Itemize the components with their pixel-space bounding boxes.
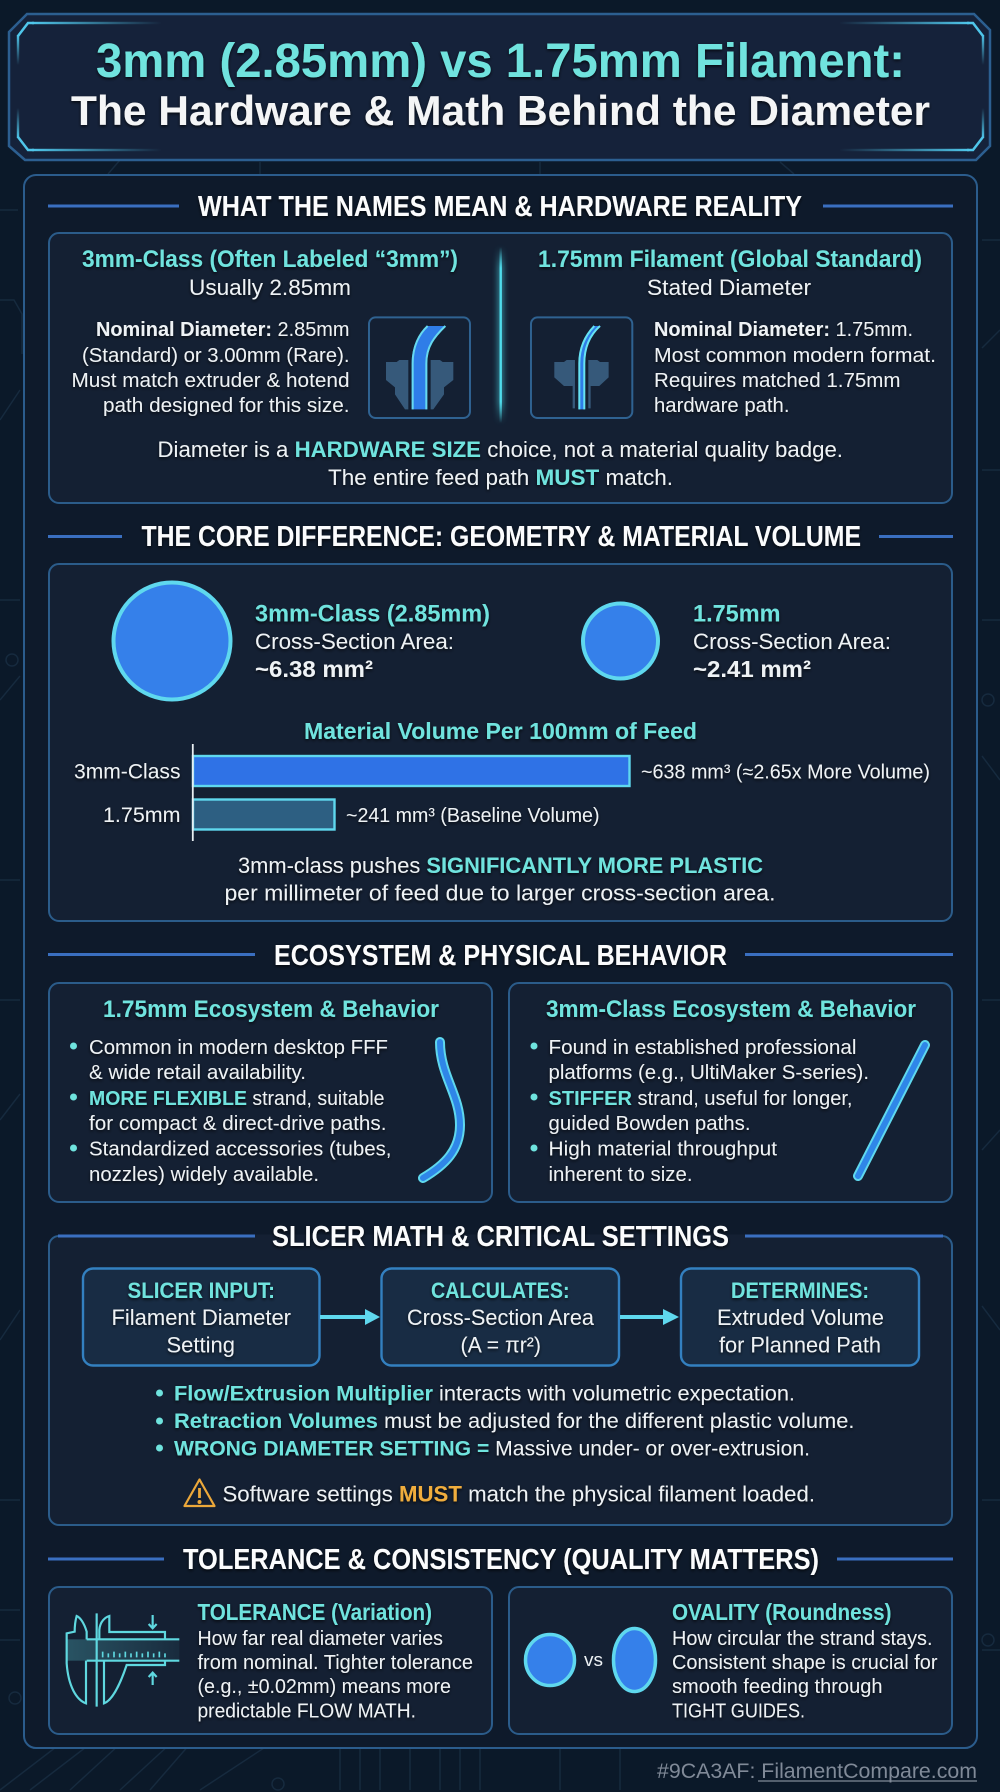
panel: 3mm ecosystem: guided Bowden paths. xyxy=(548,1113,750,1135)
bullet list: slicer notes: WRONG DIAMETER SETTING = Massive under- or over-extrusion. xyxy=(174,1436,810,1460)
icon: large cross-section circle xyxy=(114,582,230,700)
panel: 3mm ecosystem: STIFFER strand, useful for longer, xyxy=(548,1088,852,1110)
arrow: calculates to determines xyxy=(620,1309,679,1325)
text block: 3mm-class: (Standard) or 3.00mm (Rare). xyxy=(82,345,350,367)
icon: flexible strand xyxy=(423,1042,460,1178)
text block: 3mm-class xyxy=(72,246,458,417)
bar chart: material volume: ~241 mm³ (Baseline Volume) xyxy=(346,805,600,827)
panel: 1.75mm ecosystem: MORE FLEXIBLE strand, suitable xyxy=(89,1088,384,1110)
flow box: slicer input: SLICER INPUT: xyxy=(128,1278,275,1303)
text block: 3mm area xyxy=(255,600,490,682)
heading: ecosystem: ECOSYSTEM & PHYSICAL BEHAVIOR xyxy=(274,940,727,972)
callout: hardware size: Diameter is a HARDWARE SIZE choice, not a material quality badge. xyxy=(158,437,843,462)
text block: 1.75mm area xyxy=(693,600,891,682)
flow box: determines: DETERMINES: xyxy=(731,1278,869,1303)
chart title: Material Volume Per 100mm of Feed xyxy=(304,718,697,744)
panel: 1.75mm ecosystem: Standardized accessories (tubes, xyxy=(89,1138,392,1160)
text block: 3mm area: 3mm-Class (2.85mm) xyxy=(255,600,490,628)
panel: 3mm ecosystem: inherent to size. xyxy=(548,1164,692,1186)
flow box: calculates: (A = πr²) xyxy=(460,1332,541,1358)
bullet list: slicer notes: Flow/Extrusion Multiplier interacts with volumetric expectation. xyxy=(174,1382,795,1406)
icon: 1.75mm nozzle xyxy=(531,317,632,418)
bar: 3mm-class xyxy=(193,756,630,786)
panel: 1.75mm ecosystem: for compact & direct-drive paths. xyxy=(89,1113,386,1135)
footer credit: #9CA3AF: FilamentCompare.com xyxy=(657,1760,977,1783)
text block: 3mm area: Cross-Section Area: xyxy=(255,629,454,654)
heading: what the names mean: WHAT THE NAMES MEAN & HARDWARE REALITY xyxy=(198,191,802,223)
panel: ovality: smooth feeding through xyxy=(672,1676,882,1698)
text block: 1.75mm: Requires matched 1.75mm xyxy=(654,370,900,392)
icon: stiff strand xyxy=(858,1045,925,1176)
bar chart: material volume xyxy=(74,718,930,841)
bar chart: material volume: 3mm-Class xyxy=(74,760,180,784)
flow box: determines: Extruded Volume xyxy=(717,1305,884,1330)
panel: names xyxy=(49,233,952,503)
panel: ovality xyxy=(509,1587,952,1734)
text block: 3mm-class: 3mm-Class (Often Labeled “3mm”) xyxy=(82,246,458,273)
section: ecosystem xyxy=(48,940,953,1202)
bar chart: material volume: 1.75mm xyxy=(103,804,180,827)
text block: 1.75mm area: 1.75mm xyxy=(693,600,780,628)
panel: 3mm ecosystem: Found in established professional xyxy=(548,1037,856,1059)
panel: 1.75mm ecosystem: & wide retail availability. xyxy=(89,1062,306,1084)
panel: tolerance: How far real diameter varies xyxy=(198,1628,443,1650)
heading: tolerance: TOLERANCE & CONSISTENCY (QUALITY MATTERS) xyxy=(183,1544,819,1576)
flow box: slicer input: Setting xyxy=(166,1332,235,1358)
bar chart: material volume: ~638 mm³ (≈2.65x More Volume) xyxy=(641,762,930,784)
title banner xyxy=(9,14,990,160)
text block: plastic summary xyxy=(224,853,776,906)
callout: hardware size xyxy=(158,437,843,490)
text block: 3mm area: ~6.38 mm² xyxy=(255,656,373,682)
flow box: slicer input: Filament Diameter xyxy=(112,1305,291,1330)
panel: 3mm ecosystem xyxy=(509,983,952,1202)
panel: 1.75mm ecosystem: nozzles) widely available. xyxy=(89,1164,319,1186)
panel: slicer xyxy=(49,1236,952,1525)
flow box: calculates: CALCULATES: xyxy=(431,1278,570,1303)
section: tolerance xyxy=(48,1544,953,1734)
section: core difference xyxy=(48,521,953,921)
bullet list: slicer notes xyxy=(156,1382,854,1460)
title line 2: The Hardware & Math Behind the Diameter xyxy=(71,87,930,134)
icon: caliper xyxy=(67,1613,179,1707)
callout: hardware size: The entire feed path MUST match. xyxy=(328,465,673,490)
panel: ovality: How circular the strand stays. xyxy=(672,1628,932,1650)
panel: 3mm ecosystem: 3mm-Class Ecosystem & Behavior xyxy=(546,996,916,1023)
panel: 1.75mm ecosystem: 1.75mm Ecosystem & Behavior xyxy=(103,996,439,1023)
panel: 3mm ecosystem: High material throughput xyxy=(548,1138,777,1160)
text block: 1.75mm: Stated Diameter xyxy=(647,275,812,300)
bullet list: slicer notes: Retraction Volumes must be adjusted for the different plastic volume. xyxy=(174,1409,854,1433)
heading: slicer: SLICER MATH & CRITICAL SETTINGS xyxy=(272,1221,729,1253)
text block: 3mm-class: Nominal Diameter: 2.85mm xyxy=(96,319,350,341)
panel: tolerance xyxy=(49,1587,492,1734)
panel: ovality: Consistent shape is crucial for xyxy=(672,1652,938,1674)
icon: round vs oval: vs xyxy=(584,1650,603,1670)
text block: 1.75mm xyxy=(538,246,936,417)
panel: ovality: TIGHT GUIDES. xyxy=(672,1700,805,1722)
icon: small cross-section circle xyxy=(583,604,658,678)
panel: 3mm ecosystem: platforms (e.g., UltiMaker S-series). xyxy=(548,1062,869,1084)
text block: 1.75mm: Most common modern format. xyxy=(654,345,936,367)
section: what the names mean xyxy=(48,191,953,503)
arrow: input to calculates xyxy=(320,1309,380,1325)
flow box: determines: for Planned Path xyxy=(719,1332,881,1358)
icon: round vs oval xyxy=(526,1628,656,1692)
section: slicer math xyxy=(49,1221,952,1525)
flow box: calculates xyxy=(382,1268,619,1366)
text block: 1.75mm: Nominal Diameter: 1.75mm. xyxy=(654,319,913,341)
text block: 3mm-class: Usually 2.85mm xyxy=(189,275,351,300)
text block: 1.75mm area: Cross-Section Area: xyxy=(693,629,891,654)
text block: 1.75mm area: ~2.41 mm² xyxy=(693,656,811,682)
panel: tolerance: from nominal. Tighter tolerance xyxy=(198,1652,473,1674)
warning text: Software settings MUST match the physical filament loaded. xyxy=(222,1482,815,1506)
text block: 3mm-class: Must match extruder & hotend xyxy=(72,370,350,392)
flow box: determines xyxy=(681,1268,919,1366)
panel: 1.75mm ecosystem: Common in modern desktop FFF xyxy=(89,1037,388,1059)
text block: 1.75mm: 1.75mm Filament (Global Standard) xyxy=(538,246,922,273)
text block: 3mm-class: path designed for this size. xyxy=(103,395,350,417)
divider xyxy=(498,247,504,423)
text block: 1.75mm: hardware path. xyxy=(654,395,790,417)
flow box: calculates: Cross-Section Area xyxy=(407,1305,595,1330)
flow box: slicer input xyxy=(83,1268,320,1366)
panel: tolerance: (e.g., ±0.02mm) means more xyxy=(198,1676,451,1698)
icon: 3mm nozzle xyxy=(369,317,470,418)
heading: core difference: THE CORE DIFFERENCE: GEOMETRY & MATERIAL VOLUME xyxy=(142,521,861,553)
icon: warning triangle xyxy=(184,1480,214,1506)
panel: 1.75mm ecosystem xyxy=(49,983,492,1202)
title line 1: 3mm (2.85mm) vs 1.75mm Filament: xyxy=(96,35,905,88)
text block: plastic summary: per millimeter of feed due to larger cross-section area. xyxy=(224,880,776,906)
panel: geometry xyxy=(49,564,952,921)
text block: plastic summary: 3mm-class pushes SIGNIFICANTLY MORE PLASTIC xyxy=(238,853,763,878)
panel: tolerance: predictable FLOW MATH. xyxy=(198,1700,416,1722)
panel: ovality: OVALITY (Roundness) xyxy=(672,1599,892,1625)
panel: tolerance: TOLERANCE (Variation) xyxy=(198,1599,432,1625)
bar: 1.75mm xyxy=(193,800,334,830)
